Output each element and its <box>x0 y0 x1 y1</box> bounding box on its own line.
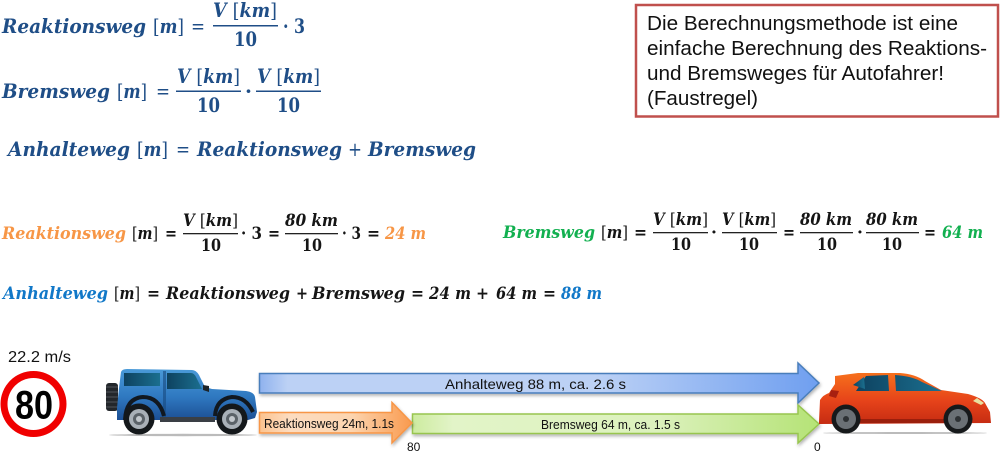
calculation: Reaktionsweg example: = <box>367 224 380 244</box>
calculation: Anhalteweg example: 24 m <box>428 284 471 304</box>
calculation: Bremsweg example: [m] <box>601 223 628 243</box>
calculation: Bremsweg example <box>502 210 983 255</box>
calculation: Reaktionsweg example: 80 km <box>284 211 338 231</box>
calculation: Anhalteweg example: = <box>543 284 556 304</box>
formula: Bremsweg: [m] <box>117 79 147 103</box>
formula: Reaktionsweg: · 3 <box>283 14 305 38</box>
calculation: Bremsweg example: V [km] <box>653 210 708 230</box>
calculation: Anhalteweg example: Anhalteweg <box>1 284 108 304</box>
icon: 80 speed limit sign <box>0 371 66 437</box>
calculation: Reaktionsweg example: 10 <box>302 236 322 256</box>
callout: Faustregel note: (Faustregel) <box>647 88 758 110</box>
calculation: Reaktionsweg example: = <box>268 224 280 244</box>
calculation: Bremsweg example: Bremsweg <box>502 223 595 243</box>
icon: blue SUV <box>106 369 257 436</box>
calculation: Reaktionsweg example: = <box>165 224 177 244</box>
formula: Anhalteweg: [m] <box>137 137 168 161</box>
formula: Bremsweg: 10 <box>197 93 220 117</box>
calculation: Anhalteweg example: [m] <box>114 284 140 304</box>
formula: Bremsweg: · <box>245 79 252 103</box>
callout: Faustregel note: Die Berechnungsmethode ist eine <box>647 13 958 35</box>
calculation: Bremsweg example: 64 m <box>942 223 983 243</box>
callout: Faustregel note <box>636 5 998 116</box>
formula: Bremsweg: Bremsweg <box>1 79 110 103</box>
formula: Reaktionsweg: = <box>191 14 205 38</box>
formula: Reaktionsweg <box>1 0 305 51</box>
callout: Faustregel note: einfache Berechnung des Reaktions- <box>647 38 987 60</box>
formula: Reaktionsweg: 10 <box>234 27 257 51</box>
calculation: Bremsweg example: 10 <box>882 235 902 255</box>
calculation: Anhalteweg example: + <box>476 284 489 304</box>
calculation: Reaktionsweg example: Reaktionsweg <box>1 224 126 244</box>
formula: Anhalteweg <box>6 137 476 161</box>
formula: Anhalteweg: Bremsweg <box>367 137 476 161</box>
calculation: Bremsweg example: 10 <box>671 235 691 255</box>
calculation: Bremsweg example: · <box>711 223 717 243</box>
calculation: Anhalteweg example: = <box>411 284 424 304</box>
arrow: Anhalteweg: Anhalteweg 88 m, ca. 2.6 s <box>445 376 626 392</box>
calculation: Bremsweg example: V [km] <box>722 210 776 230</box>
calculation: Reaktionsweg example <box>1 211 426 256</box>
calculation: Anhalteweg example: + <box>296 284 308 304</box>
formula: Bremsweg <box>1 64 321 117</box>
arrow: Bremsweg: Bremsweg 64 m, ca. 1.5 s <box>541 418 680 432</box>
calculation: Bremsweg example: 10 <box>817 235 837 255</box>
formula: Anhalteweg: + <box>348 137 362 161</box>
calculation: Bremsweg example: = <box>634 223 647 243</box>
formula: Bremsweg: V [km] <box>177 64 240 88</box>
arrow: Reaktionsweg: Reaktionsweg 24m, 1.1s <box>264 416 394 431</box>
formula: Anhalteweg: Anhalteweg <box>6 137 130 161</box>
callout: Faustregel note: und Bremsweges für Autofahrer! <box>647 63 944 85</box>
formula: Reaktionsweg: Reaktionsweg <box>1 14 146 38</box>
formula: Anhalteweg: = <box>176 137 190 161</box>
formula: Bremsweg: = <box>156 79 170 103</box>
calculation: Bremsweg example: 80 km <box>799 210 852 230</box>
calculation: Reaktionsweg example: · 3 <box>342 224 361 244</box>
calculation: Reaktionsweg example: [m] <box>132 224 158 244</box>
arrow: Bremsweg <box>412 405 819 443</box>
formula: Bremsweg: 10 <box>277 93 300 117</box>
calculation: Bremsweg example: · <box>857 223 863 243</box>
calculation: Bremsweg example: 10 <box>739 235 759 255</box>
calculation: Reaktionsweg example: 10 <box>201 236 221 256</box>
calculation: Reaktionsweg example: 24 m <box>384 224 426 244</box>
calculation: Anhalteweg example: Reaktionsweg <box>165 284 290 304</box>
formula: Anhalteweg: Reaktionsweg <box>196 137 342 161</box>
calculation: Bremsweg example: = <box>783 223 795 243</box>
calculation: Reaktionsweg example: · 3 <box>241 224 262 244</box>
calculation: Anhalteweg example: 88 m <box>560 284 602 304</box>
calculation: Bremsweg example: 80 km <box>865 210 918 230</box>
speed label: 22.2 m/s <box>8 349 71 366</box>
formula: Bremsweg: V [km] <box>257 64 320 88</box>
calculation: Anhalteweg example: = <box>147 284 160 304</box>
calculation: Reaktionsweg example: V [km] <box>183 211 238 231</box>
icon: orange hatchback <box>819 373 991 434</box>
calculation: Anhalteweg example <box>1 284 602 304</box>
arrow: Anhalteweg <box>260 363 819 403</box>
calculation: Anhalteweg example: Bremsweg <box>311 284 405 304</box>
arrow: Reaktionsweg <box>260 402 412 443</box>
calculation: Bremsweg example: = <box>924 223 936 243</box>
calculation: Anhalteweg example: 64 m <box>496 284 537 304</box>
formula: Reaktionsweg: [m] <box>153 14 184 38</box>
icon: 80 speed limit sign: 80 <box>15 384 53 428</box>
